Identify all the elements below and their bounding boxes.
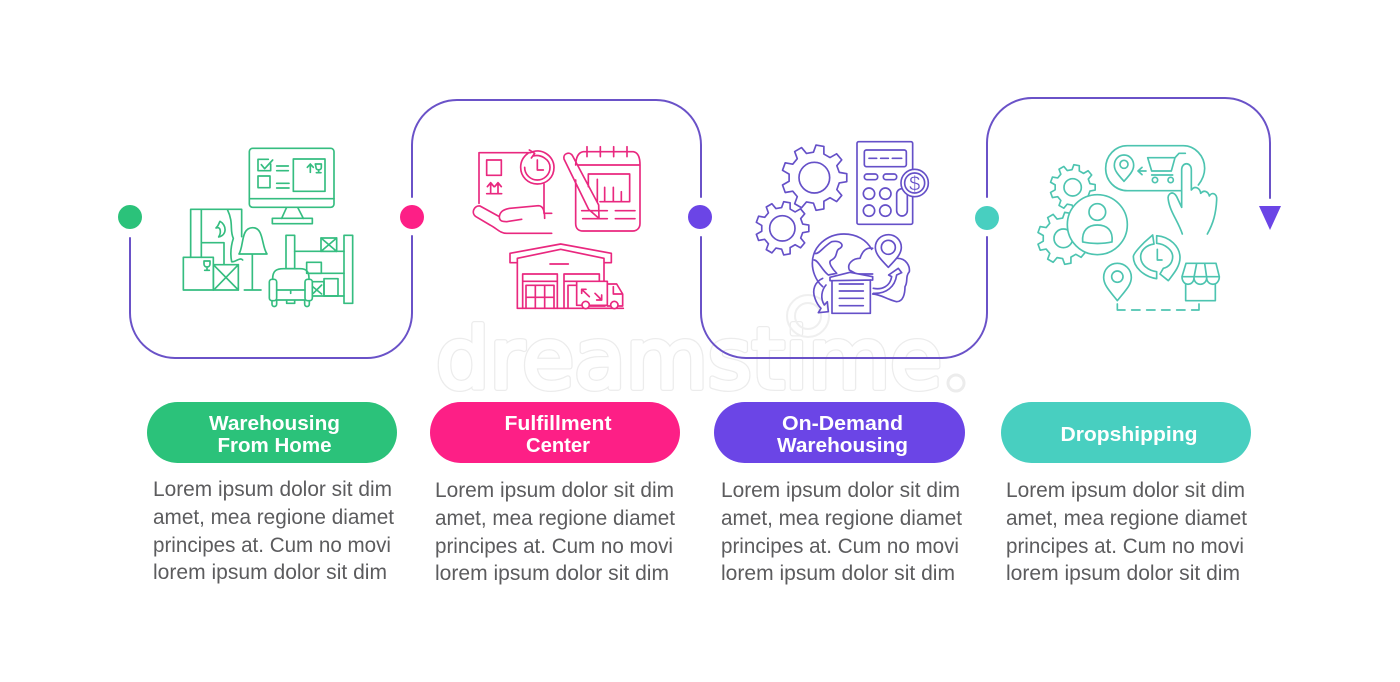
icon: fulfillment center: [473, 147, 640, 309]
text block: column 1: amet, mea regione diamet: [153, 506, 394, 529]
watermark: dreamstime: [436, 310, 942, 408]
text block: column 1: lorem ipsum dolor sit dim: [153, 561, 387, 584]
text block: column 4: Lorem ipsum dolor sit dim: [1006, 479, 1245, 502]
pill label: Fulfillment Center: Fulfillment: [504, 412, 612, 435]
timeline dot: purple: [688, 205, 712, 229]
pill label: Warehousing From Home: From Home: [218, 434, 332, 457]
text block: column 2: [435, 479, 675, 585]
pill label: Dropshipping: [1001, 402, 1251, 463]
text block: column 3: Lorem ipsum dolor sit dim: [721, 479, 960, 502]
pill label: On-Demand Warehousing: [714, 402, 965, 463]
pill label: Warehousing From Home: Warehousing: [209, 412, 340, 435]
timeline dot: green: [118, 205, 142, 229]
text block: column 4: principes at. Cum no movi: [1006, 535, 1244, 558]
text block: column 1: principes at. Cum no movi: [153, 534, 391, 557]
text block: column 1: [153, 478, 394, 584]
pill label: Warehousing From Home: [147, 402, 397, 463]
arrow head: [1259, 206, 1281, 230]
icon: dropshipping: [1038, 146, 1219, 310]
pill label: Fulfillment Center: [430, 402, 680, 463]
text block: column 3: [721, 479, 962, 585]
text block: column 4: [1006, 479, 1247, 585]
text block: column 2: lorem ipsum dolor sit dim: [435, 562, 669, 585]
text block: column 3: lorem ipsum dolor sit dim: [721, 562, 955, 585]
timeline connector: winding line: [130, 98, 1270, 358]
timeline dot: teal: [975, 206, 999, 230]
text block: column 4: amet, mea regione diamet: [1006, 507, 1247, 530]
text block: column 4: lorem ipsum dolor sit dim: [1006, 562, 1240, 585]
watermark: dreamstime: [436, 310, 942, 408]
text block: column 2: principes at. Cum no movi: [435, 535, 673, 558]
pill label: Fulfillment Center: Center: [526, 434, 590, 457]
text block: column 2: Lorem ipsum dolor sit dim: [435, 479, 674, 502]
pill label: Dropshipping: Dropshipping: [1060, 423, 1198, 446]
pill label: On-Demand Warehousing: Warehousing: [777, 434, 908, 457]
timeline dot: pink: [400, 205, 424, 229]
text block: column 3: principes at. Cum no movi: [721, 535, 959, 558]
text block: column 1: Lorem ipsum dolor sit dim: [153, 478, 392, 501]
pill label: On-Demand Warehousing: On-Demand: [782, 412, 903, 435]
icon: on-demand warehousing: [756, 142, 928, 313]
icon: on-demand warehousing: $: [909, 173, 920, 195]
text block: column 3: amet, mea regione diamet: [721, 507, 962, 530]
icon: warehousing from home: [183, 148, 353, 306]
text block: column 2: amet, mea regione diamet: [435, 507, 675, 530]
